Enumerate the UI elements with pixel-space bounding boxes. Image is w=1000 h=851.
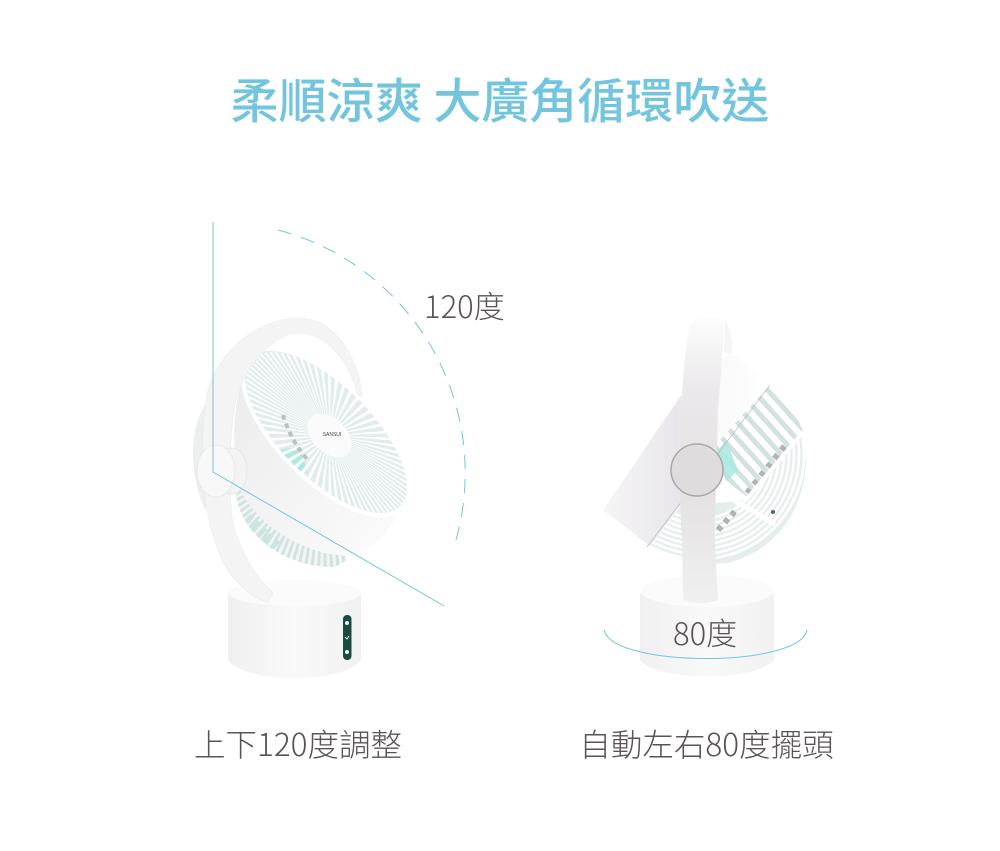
- dashed 120 degree arc: [278, 230, 465, 540]
- pivot hub: [197, 445, 247, 497]
- left fan product: [193, 318, 407, 677]
- fan logo: SANSUI: [323, 432, 341, 438]
- right arm: [680, 317, 725, 603]
- teal glow behind blades: [280, 447, 308, 473]
- fan shell: [234, 357, 400, 556]
- seam line: [647, 385, 770, 547]
- label: 80 degrees: 80度: [673, 609, 737, 654]
- lower grille arcs: [651, 438, 806, 564]
- right fan shell: [603, 352, 770, 546]
- right top ring: [724, 320, 732, 354]
- grey dash ring on face: [283, 415, 308, 460]
- label: 120 degrees: 120度: [424, 282, 505, 327]
- left angle guide lines: [213, 222, 444, 606]
- arm and top ring: [203, 318, 362, 602]
- upper grille bars: [717, 388, 803, 496]
- right fan product: [604, 320, 806, 676]
- fan face: [242, 351, 407, 513]
- right swing arc: [604, 630, 807, 658]
- central rib: [745, 432, 803, 501]
- right fan base: [640, 575, 774, 676]
- hub: [299, 405, 360, 466]
- caption: left: 上下120度調整: [194, 720, 402, 766]
- title: 柔順涼爽 大廣角循環吹送: [231, 62, 769, 132]
- control panel: [343, 615, 352, 660]
- rear left grille sliver: [193, 405, 212, 510]
- rear grille: [236, 490, 347, 567]
- left fan base: [228, 580, 361, 678]
- caption: right: 自動左右80度擺頭: [579, 720, 834, 766]
- right pivot hub: [671, 444, 723, 496]
